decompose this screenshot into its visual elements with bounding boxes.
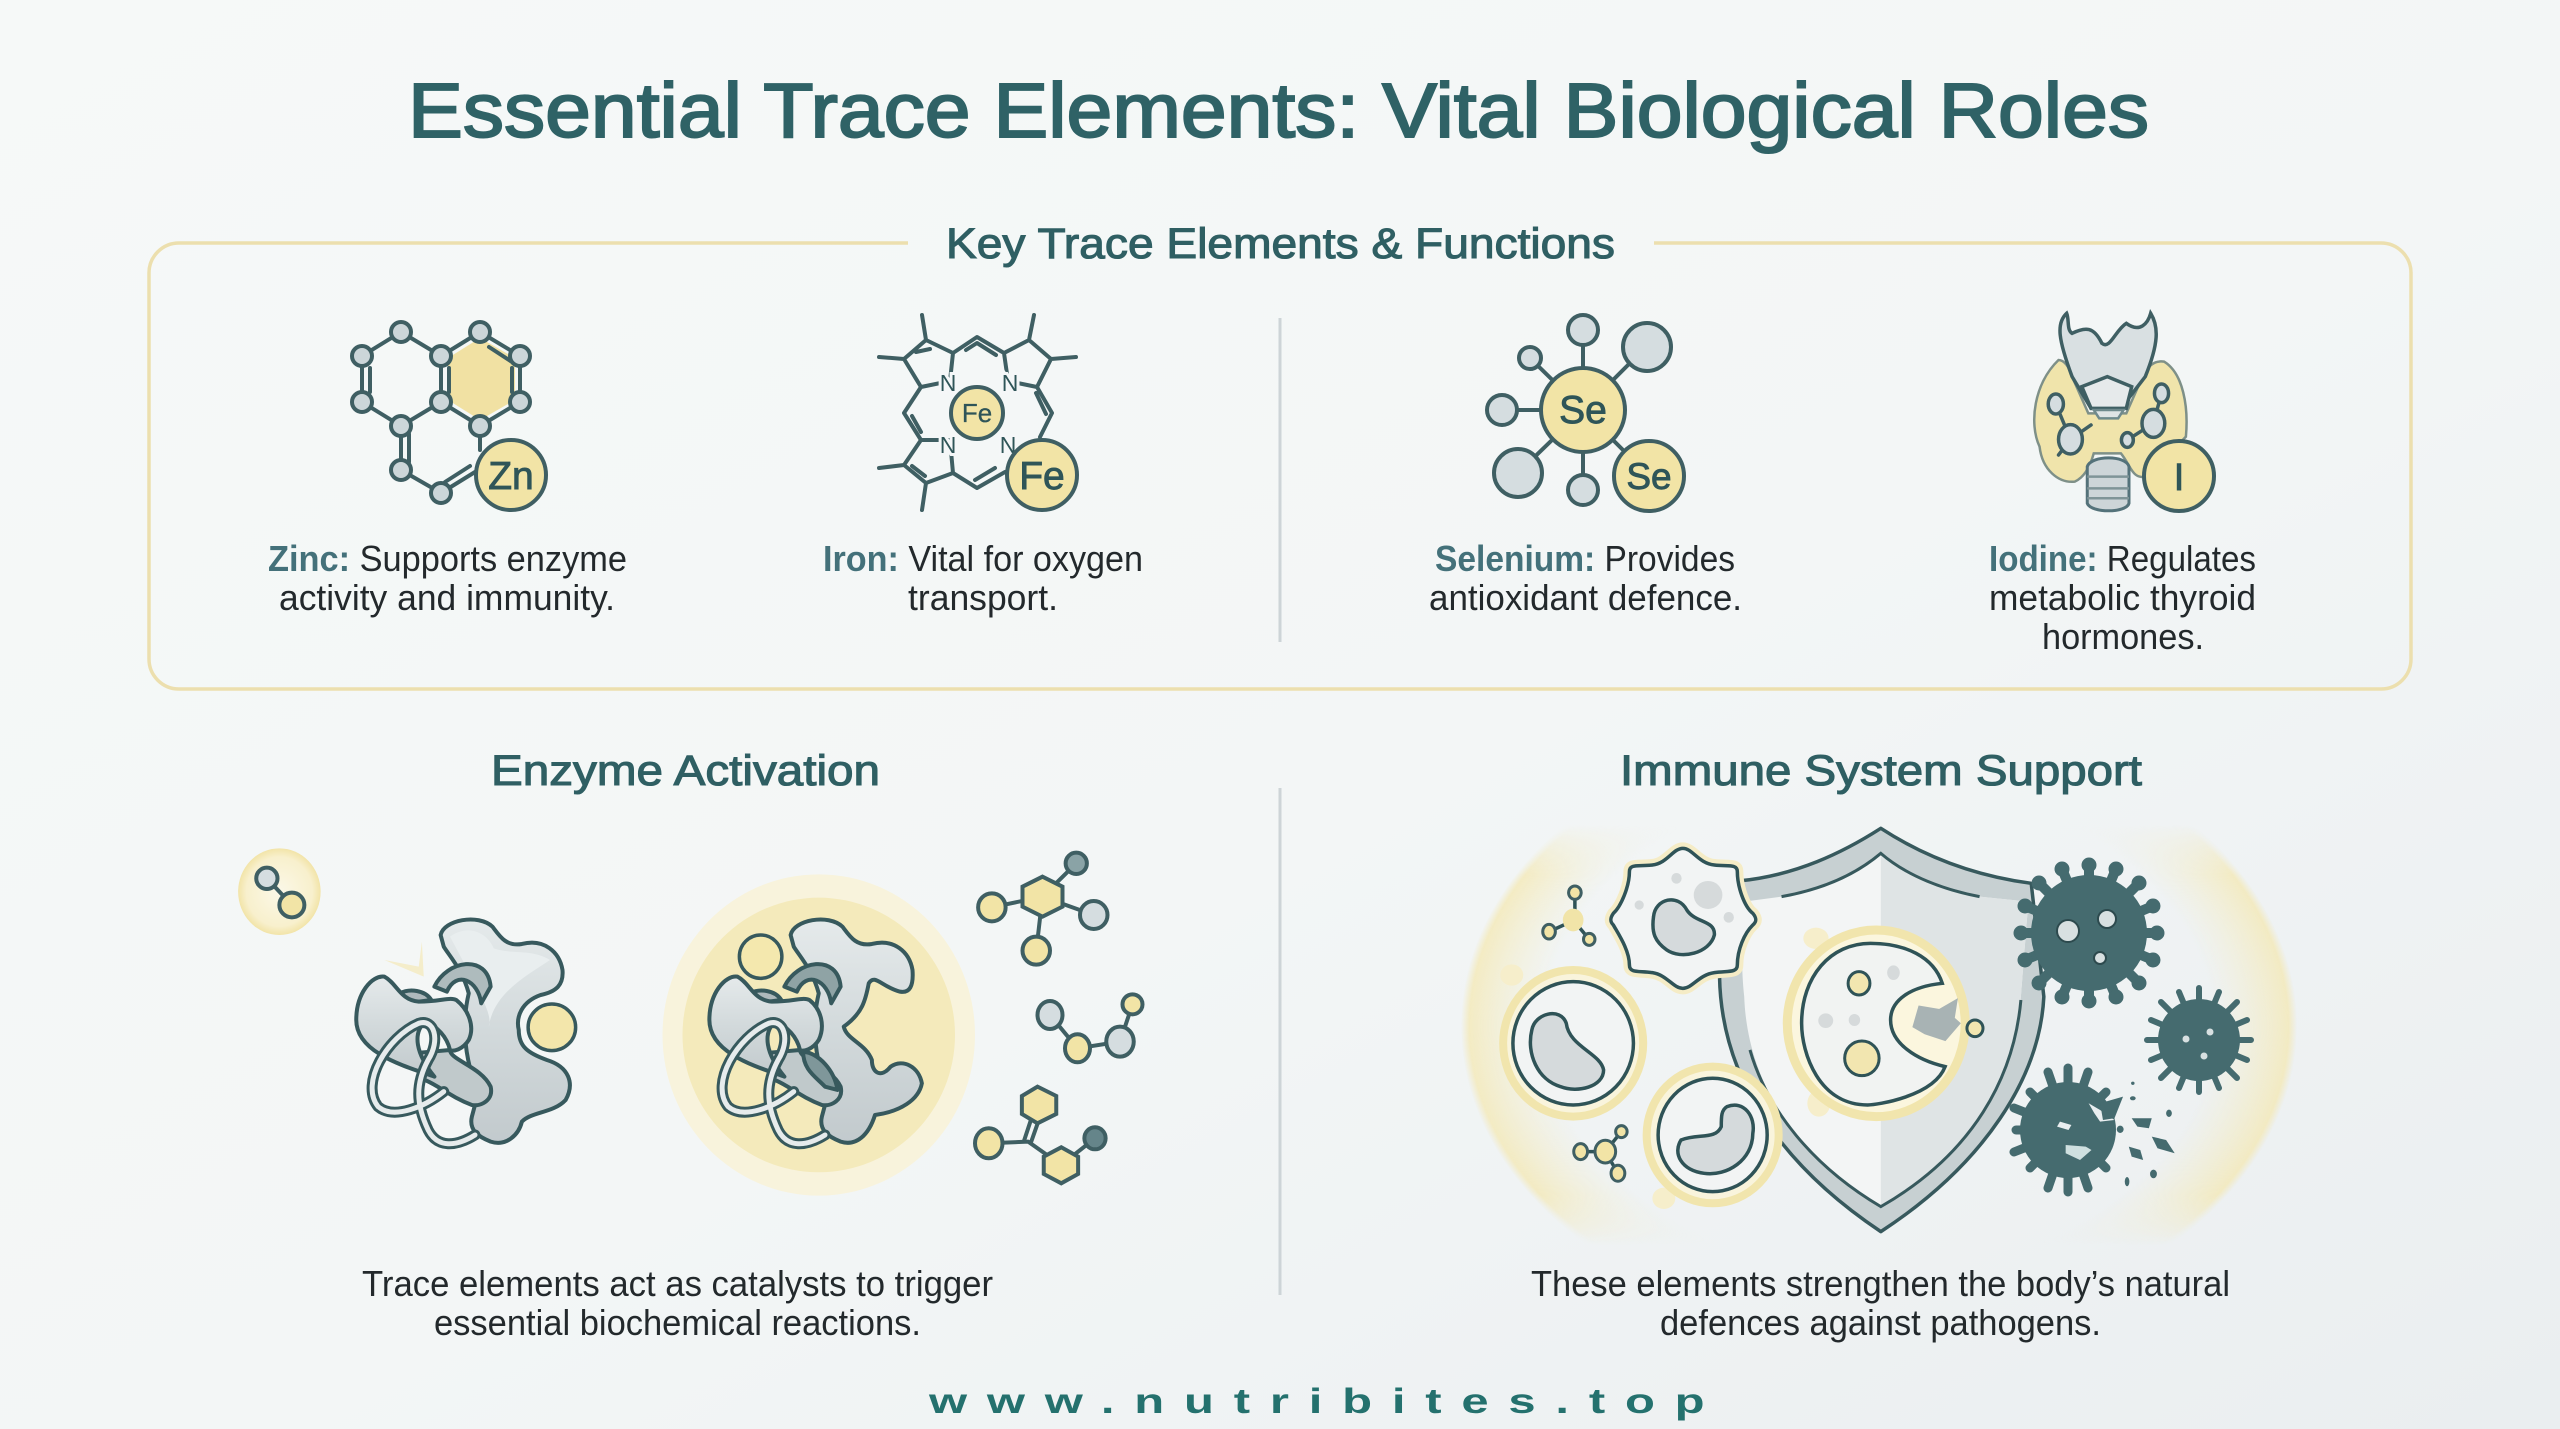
section: immune system support xyxy=(1461,720,2297,1343)
text: iron: transport. xyxy=(908,577,1058,618)
caption: enzyme activation: Trace elements act as catalysts to trigger xyxy=(362,1263,993,1304)
icon: iron porphyrin: N xyxy=(1000,432,1016,458)
caption: immune system support: defences against pathogens. xyxy=(1660,1302,2101,1343)
text: selenium: antioxidant defence. xyxy=(1429,577,1742,618)
panel border xyxy=(149,243,2411,689)
section: enzyme activation xyxy=(238,747,1142,1343)
text: iodine: metabolic thyroid xyxy=(1989,577,2256,618)
caption: enzyme activation xyxy=(362,1263,993,1343)
icon: virus large xyxy=(2021,865,2157,1001)
text: selenium: Selenium: Provides xyxy=(1435,538,1735,579)
text: selenium xyxy=(1429,538,1742,618)
icon: iron porphyrin: Fe xyxy=(1019,455,1065,498)
footer url: www.nutribites.top xyxy=(928,1382,1705,1421)
panel: key trace elements and functions xyxy=(149,220,2411,689)
icon: iron porphyrin: Fe xyxy=(962,398,992,428)
icon: iron porphyrin: N xyxy=(940,432,956,458)
caption: enzyme activation: essential biochemical reactions. xyxy=(434,1302,921,1343)
icon: lymphocyte bottom xyxy=(1647,1067,1779,1209)
text: iodine: hormones. xyxy=(2042,616,2204,657)
icon: iodine thyroid xyxy=(2034,313,2214,511)
icon: iron porphyrin xyxy=(879,315,1077,510)
illustration: enzyme activation xyxy=(238,848,1142,1196)
text: iodine: Iodine: Regulates xyxy=(1989,538,2256,579)
icon: activated enzyme with glow xyxy=(662,874,975,1196)
icon: zinc molecule: Zn xyxy=(488,455,534,498)
icon: small cofactor bubble xyxy=(238,848,321,935)
caption: immune system support xyxy=(1531,1263,2230,1343)
icon: selenium molecule: Se xyxy=(1559,389,1607,432)
icon: small molecules xyxy=(1543,886,1627,1181)
icon: selenium molecule: Se xyxy=(1626,456,1672,497)
text: zinc xyxy=(268,538,627,618)
icon: iron porphyrin: N xyxy=(940,370,956,396)
panel heading: Key Trace Elements & Functions xyxy=(946,220,1615,268)
icon: inactive enzyme xyxy=(356,919,576,1144)
icon: virus breaking apart xyxy=(2014,1068,2175,1192)
icon: phagocyte engulfing pathogen xyxy=(1787,928,1983,1117)
title: Essential Trace Elements: Vital Biological Roles xyxy=(408,68,2149,154)
icon: lymphocyte left xyxy=(1500,964,1643,1117)
icon: selenium molecule xyxy=(1487,315,1684,511)
icon: shield xyxy=(1720,828,2044,1232)
icon: iodine thyroid: I xyxy=(2174,457,2184,499)
illustration: immune defence xyxy=(1462,826,2296,1236)
caption: immune system support: These elements strengthen the body’s natural xyxy=(1531,1263,2230,1304)
text: iron: Iron: Vital for oxygen xyxy=(823,538,1143,579)
icon: lymphocyte top xyxy=(1611,848,1756,988)
heading: enzyme activation: Enzyme Activation xyxy=(491,747,880,795)
text: zinc: Zinc: Supports enzyme xyxy=(268,538,627,579)
icon: virus medium xyxy=(2147,988,2251,1092)
icon: product molecules xyxy=(975,853,1142,1183)
text: iron xyxy=(823,538,1143,618)
icon: zinc molecule xyxy=(352,322,546,510)
text: iodine xyxy=(1989,538,2256,657)
icon: iron porphyrin: N xyxy=(1002,370,1018,396)
text: zinc: activity and immunity. xyxy=(279,577,615,618)
heading: immune system support: Immune System Support xyxy=(1620,747,2142,795)
